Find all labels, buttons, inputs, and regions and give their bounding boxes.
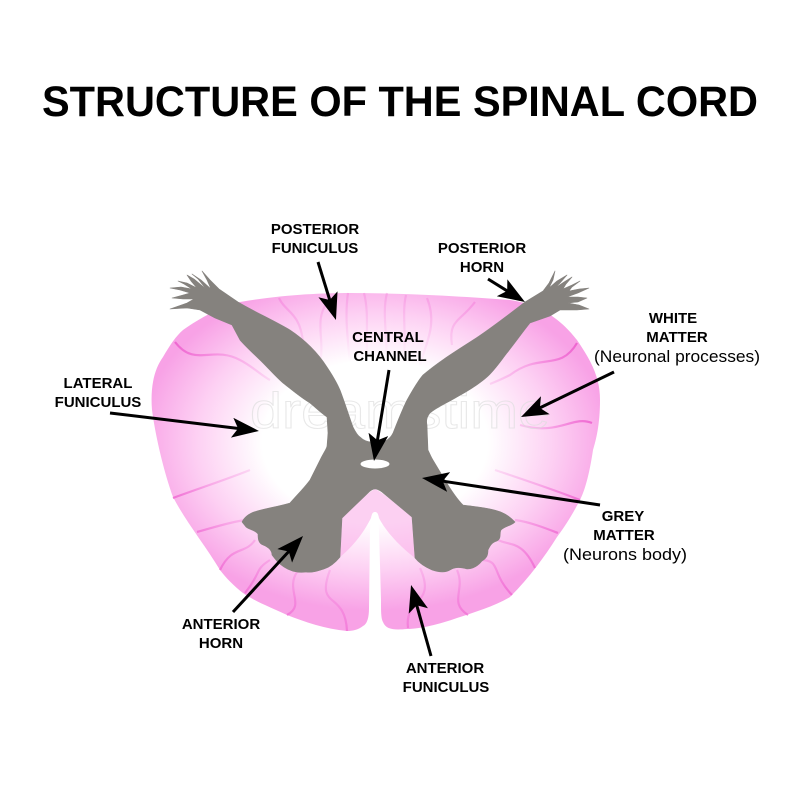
spinal cord cross-section [152,271,600,631]
title: STRUCTURE OF THE SPINAL CORD [42,78,758,126]
label: anterior horn: HORN [199,635,243,652]
label: anterior funiculus: FUNICULUS [403,679,489,696]
white matter vessels [173,293,592,631]
label: anterior horn [182,542,298,652]
central canal [360,460,390,468]
label: posterior funiculus [271,221,359,312]
label: white matter: (Neuronal processes) [594,347,760,366]
label: white matter: WHITE [649,310,697,327]
label: lateral funiculus: LATERAL [64,375,132,392]
label: grey matter: MATTER [593,527,655,544]
label: grey matter [430,479,687,564]
label: anterior horn: ANTERIOR [182,616,260,633]
label: posterior funiculus: FUNICULUS [272,240,358,257]
grey matter [170,271,589,572]
label: white matter [528,310,760,414]
label: anterior funiculus [403,593,489,696]
label: central channel: CENTRAL [352,329,424,346]
label: posterior funiculus: POSTERIOR [271,221,359,238]
label: posterior horn: HORN [460,259,504,276]
watermark: dreamstime [250,383,550,439]
label: anterior funiculus: ANTERIOR [406,660,484,677]
label: white matter: MATTER [646,329,708,346]
label: central channel: CHANNEL [353,348,427,365]
label: lateral funiculus: FUNICULUS [55,394,141,411]
label: central channel [352,329,427,453]
label: posterior horn: POSTERIOR [438,240,526,257]
label: grey matter: (Neurons body) [563,545,687,564]
anterior median fissure shading [340,489,415,558]
label: posterior horn [438,240,526,298]
white matter [152,293,600,631]
label: grey matter: GREY [602,508,644,525]
label: lateral funiculus [55,375,251,430]
